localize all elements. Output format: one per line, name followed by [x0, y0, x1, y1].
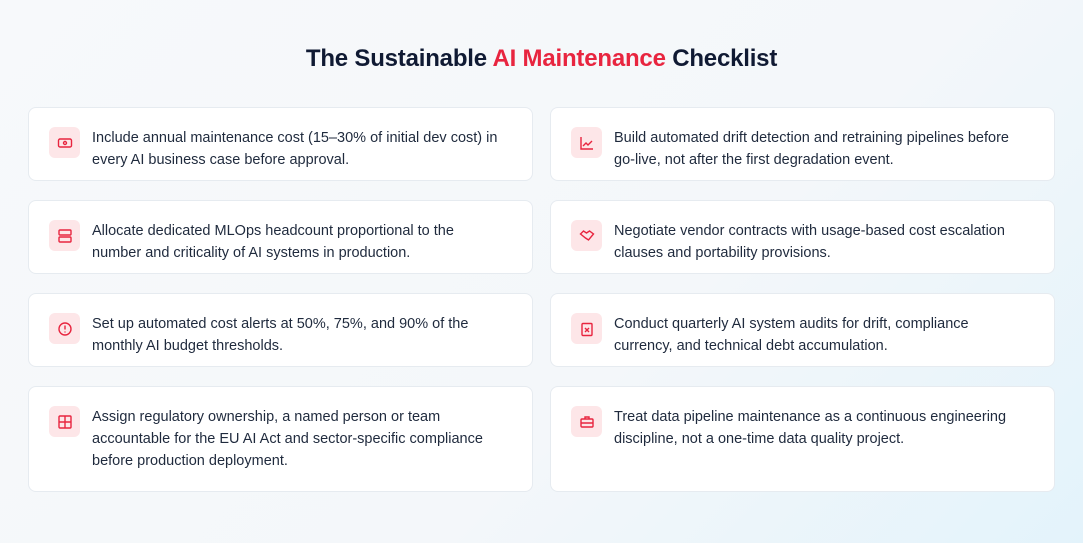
card: vendor contracts	[550, 200, 1055, 274]
icon: building	[49, 406, 80, 437]
card: cost alerts	[28, 293, 533, 367]
text: Include annual maintenance cost (15–30% of initial dev cost) in every AI business case before approval.	[92, 130, 497, 168]
card: regulatory ownership	[28, 386, 533, 492]
card: annual maintenance cost	[28, 107, 533, 181]
text: Treat data pipeline maintenance as a continuous engineering discipline, not a one-time data quality project.	[614, 409, 1006, 447]
text: Conduct quarterly AI system audits for drift, compliance currency, and technical debt accumulation.	[614, 316, 969, 354]
text: Set up automated cost alerts at 50%, 75%, and 90% of the monthly AI budget thresholds.	[92, 316, 468, 354]
icon: alert	[49, 313, 80, 344]
icon: handshake	[571, 220, 602, 251]
icon: toolbox	[571, 406, 602, 437]
icon: clipboard	[571, 313, 602, 344]
text: Assign regulatory ownership, a named person or team accountable for the EU AI Act and sector-specific compliance before production deployment.	[92, 409, 483, 469]
icon: money	[49, 127, 80, 158]
text: Build automated drift detection and retraining pipelines before go-live, not after the first degradation event.	[614, 130, 1009, 168]
text: Allocate dedicated MLOps headcount proportional to the number and criticality of AI systems in production.	[92, 223, 454, 261]
card: drift detection	[550, 107, 1055, 181]
icon: server	[49, 220, 80, 251]
card: quarterly audits	[550, 293, 1055, 367]
icon: chart	[571, 127, 602, 158]
card: MLOps headcount	[28, 200, 533, 274]
title: The Sustainable AI Maintenance Checklist	[306, 45, 777, 72]
text: Negotiate vendor contracts with usage-based cost escalation clauses and portability provisions.	[614, 223, 1005, 261]
card: data pipeline	[550, 386, 1055, 492]
